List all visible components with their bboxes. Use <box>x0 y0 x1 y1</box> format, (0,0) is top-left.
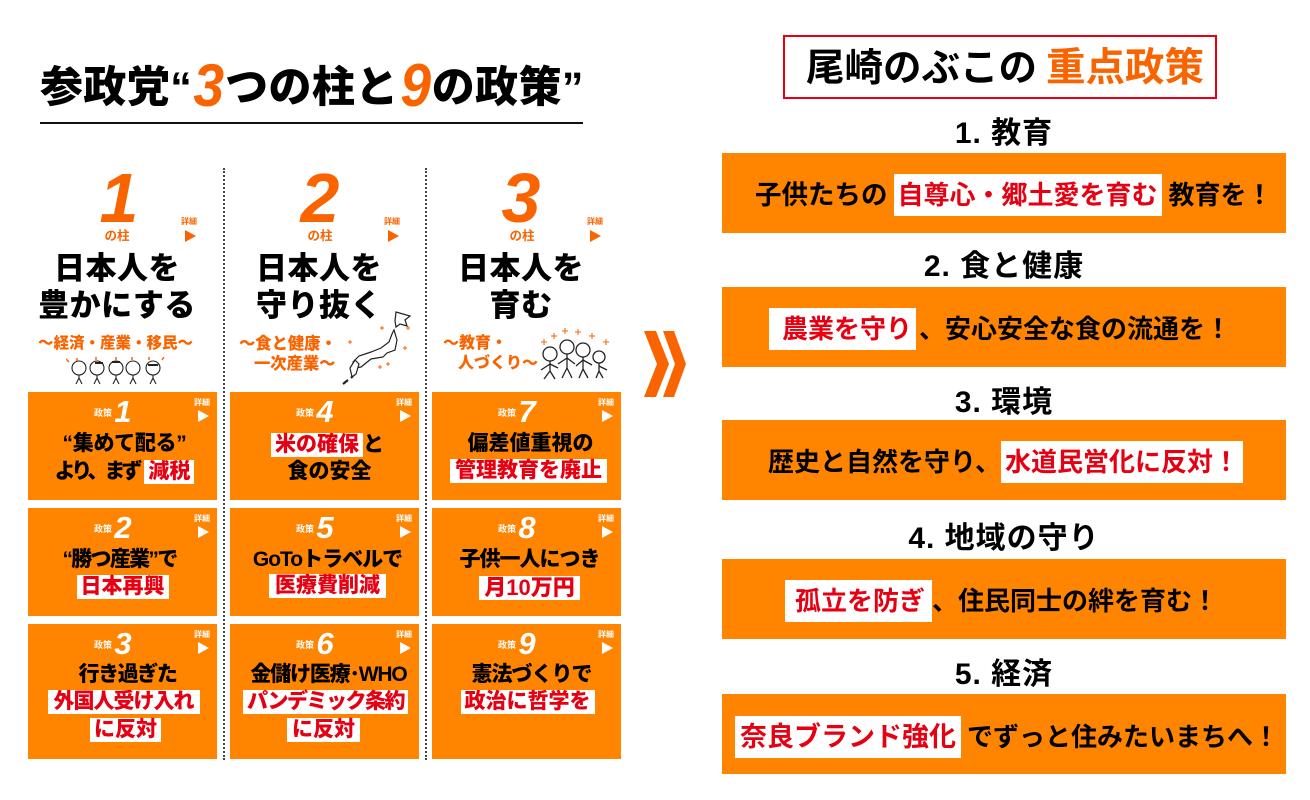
policy card 2: 2 <box>114 510 132 545</box>
policy bar 4: 孤立を防ぎ <box>795 586 925 616</box>
policy card 4: 4 <box>316 394 334 429</box>
section heading 5: 5. 経済 <box>955 658 1053 691</box>
pillar 1 detail link: 詳細 <box>181 217 197 226</box>
policy card 9 <box>432 624 621 759</box>
pillar 1 heading <box>38 251 196 322</box>
policy bar 5 <box>722 694 1286 774</box>
policy card 5: 政策 <box>296 524 314 534</box>
policy card 4 <box>230 392 419 500</box>
policy card 6: 金儲け医療･WHO <box>250 663 407 686</box>
policy bar 2: 農業を守り <box>782 314 912 344</box>
policy bar 5: 奈良ブランド強化 <box>740 722 956 752</box>
policy card 3: 政策 <box>94 640 112 650</box>
title: 3 pillars and 9 policies: 参政党“ つの柱と の政策” <box>40 64 584 112</box>
policy bar 5: でずっと住みたいまちへ！ <box>967 722 1279 752</box>
policy card 8 <box>432 508 621 616</box>
policy card 5: 詳細 <box>396 514 412 523</box>
policy card 1: 詳細 <box>194 398 210 407</box>
policy card 8: 詳細 <box>598 514 614 523</box>
pillar 2 detail link: 詳細 <box>384 217 400 226</box>
section heading 3: 3. 環境 <box>955 386 1053 419</box>
policy card 3: 外国人受け入れ <box>54 690 194 713</box>
policy card 7 <box>432 392 621 500</box>
policy card 2: 日本再興 <box>80 575 164 598</box>
pillar 3 detail link: 詳細 <box>587 217 603 226</box>
pillar 3 label: の柱 <box>509 229 534 243</box>
pillar 3 subheading: 人づくり～ <box>458 355 538 372</box>
policy card 1: 減税 <box>148 460 190 483</box>
policy card 3: に反対 <box>94 718 157 741</box>
policy card 7: 7 <box>518 394 536 429</box>
policy card 3: 詳細 <box>194 630 210 639</box>
pillar 2 heading: 日本人を <box>256 251 382 286</box>
policy card 9: 9 <box>518 626 536 661</box>
pillar 3 subheading: ～教育・ <box>443 335 507 352</box>
pillar 3 heading: 日本人を <box>458 251 584 286</box>
policy card 2: 政策 <box>94 524 112 534</box>
panel: pillar 3 header <box>443 159 609 380</box>
heading box: priority policies <box>783 35 1217 99</box>
policy card 2: 詳細 <box>194 514 210 523</box>
pillar 1 label: の柱 <box>104 229 130 243</box>
policy card 7: 政策 <box>498 408 516 418</box>
pillar 2 subheading: 一次産業～ <box>254 355 335 373</box>
heading text: 尾崎のぶこの重点政策 <box>806 46 1204 90</box>
policy card 2: “勝つ産業”で <box>62 548 177 571</box>
policy card 9: 政治に哲学を <box>464 690 590 713</box>
pillar 3 numeral: 3 <box>502 159 540 237</box>
section heading 1: 1. 教育 <box>955 117 1053 150</box>
policy card 1: “集めて配る” <box>63 432 186 455</box>
policy card 8: 8 <box>518 510 536 545</box>
pillar 1 heading: 豊かにする <box>38 288 196 322</box>
arrow: double chevron <box>644 331 686 397</box>
policy bar 1: 子供たちの 教育を！ <box>755 180 1273 210</box>
title: 3 pillars and 9 policies: 3 <box>193 52 225 119</box>
policy card 4: 食の安全 <box>288 460 372 483</box>
policy card 7: 詳細 <box>598 398 614 407</box>
policy bar 2 <box>722 287 1286 367</box>
icon: pillar 3 arrow <box>590 230 601 242</box>
pillar 3 subheading <box>443 334 538 372</box>
policy card 5: 5 <box>316 510 334 545</box>
policy card 9: 憲法づくりで <box>472 663 592 686</box>
policy card 7: 偏差値重視の <box>468 432 594 455</box>
policy card 1: より、まず <box>55 460 138 483</box>
panel: pillar 1 header <box>38 159 196 384</box>
policy card 4: 米の確保 <box>275 433 359 456</box>
policy card 5: 医療費削減 <box>275 574 380 597</box>
icon: five people <box>66 357 165 384</box>
policy bar 3: 水道民営化に反対！ <box>1005 447 1239 477</box>
policy card 1: 政策 <box>94 408 112 418</box>
policy bar 3: 歴史と自然を守り、 <box>768 447 1001 477</box>
title: 3 pillars and 9 policies: 9 <box>400 52 431 119</box>
policy card 2 <box>28 508 217 616</box>
icon: map of Japan <box>342 311 412 385</box>
pillar 1 subheading: ～経済・産業・移民～ <box>38 335 193 352</box>
policy card 3: 3 <box>114 626 132 661</box>
policy card 9: 政策 <box>498 640 516 650</box>
policy card 4: 政策 <box>296 408 314 418</box>
policy card 8: 子供一人につき <box>460 548 600 571</box>
pillar 2 numeral: 2 <box>301 159 339 237</box>
pillar 1 heading: 日本人を <box>54 251 180 286</box>
policy card 7: 管理教育を廃止 <box>455 459 602 482</box>
panel: pillar 2 header <box>239 159 412 385</box>
icon: pillar 1 arrow <box>185 230 196 242</box>
policy card 1 <box>28 392 217 500</box>
policy card 8: 政策 <box>498 524 516 534</box>
policy bar 1 <box>722 153 1286 233</box>
policy card 6: パンデミック条約 <box>247 690 404 713</box>
policy bar 4 <box>722 559 1286 639</box>
policy card 4: と <box>363 433 384 456</box>
policy bar 2: 、安心安全な食の流通を！ <box>919 314 1231 344</box>
icon: family <box>540 328 609 380</box>
policy card 9: 詳細 <box>598 630 614 639</box>
section heading 2: 2. 食と健康 <box>924 250 1084 283</box>
policy bar 3 <box>722 420 1286 500</box>
icon: pillar 2 arrow <box>388 230 399 242</box>
pillar 3 heading: 育む <box>490 288 552 322</box>
pillar 3 heading <box>458 251 584 322</box>
policy bar 4: 、住民同士の絆を育む！ <box>932 586 1218 616</box>
policy bar 1: 自尊心・郷土愛を育む <box>898 180 1158 210</box>
policy card 6 <box>230 624 419 759</box>
pillar 2 subheading <box>239 334 337 373</box>
policy card 5: GoToトラベルで <box>253 548 402 571</box>
pillar 1 numeral: 1 <box>100 159 138 237</box>
pillar 2 label: の柱 <box>307 229 332 243</box>
policy card 8: 月10万円 <box>484 575 575 600</box>
policy card 6: に反対 <box>292 718 355 741</box>
policy card 3: 行き過ぎた <box>78 663 176 686</box>
policy card 6: 政策 <box>296 640 314 650</box>
policy card 3 <box>28 624 217 759</box>
pillar 2 heading: 守り抜く <box>256 288 382 322</box>
policy card 6: 6 <box>316 626 334 661</box>
policy card 4: 詳細 <box>396 398 412 407</box>
pillar 2 subheading: ～食と健康・ <box>239 335 337 353</box>
policy card 6: 詳細 <box>396 630 412 639</box>
pillar 2 heading <box>256 251 382 322</box>
policy card 5 <box>230 508 419 616</box>
policy card 1: 1 <box>114 394 132 429</box>
section heading 4: 4. 地域の守り <box>908 522 1100 555</box>
